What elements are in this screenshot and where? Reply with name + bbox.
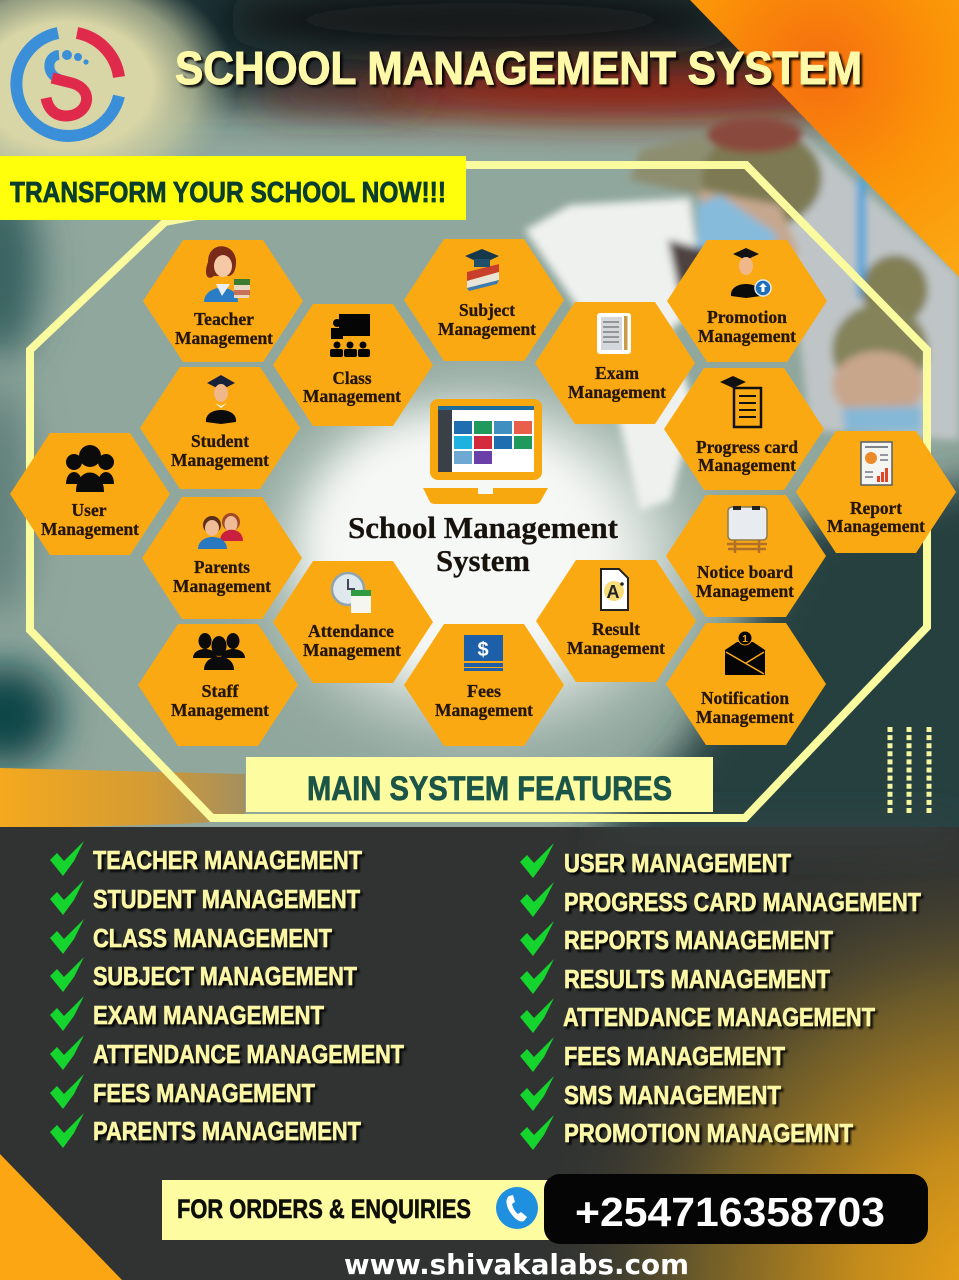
hex: staff management: Staff	[202, 681, 239, 701]
feature list: left column: ATTENDANCE MANAGEMENT	[93, 1039, 404, 1069]
feature list: left column	[50, 841, 404, 1148]
title: SCHOOL MANAGEMENT SYSTEM	[175, 42, 862, 94]
hex: exam management: Exam	[595, 363, 639, 383]
hex: progress card management	[664, 368, 824, 490]
banner: transform your school	[0, 156, 466, 220]
hex: notice board management: Notice board	[697, 562, 793, 582]
icon: laptop dashboard	[423, 399, 548, 504]
hex: notification management	[666, 623, 826, 745]
hex: parents management: Management	[173, 576, 271, 596]
hex: fees management: $	[477, 639, 489, 661]
hex: teacher management: Teacher	[194, 309, 254, 329]
hex: promotion management: Management	[698, 326, 796, 346]
hex: exam management: Management	[568, 382, 666, 402]
hex: class management	[273, 304, 433, 426]
hex: notification management: 1	[742, 634, 748, 645]
center heading	[348, 510, 619, 578]
hex: notification management: Management	[696, 707, 794, 727]
hex: attendance management	[273, 561, 433, 683]
center heading: School Management	[348, 510, 619, 545]
dotted decoration	[890, 727, 929, 813]
hex: user management: Management	[41, 519, 139, 539]
feature list: left column: PARENTS MANAGEMENT	[93, 1116, 361, 1146]
octagon frame	[30, 165, 927, 818]
feature list: right column: PROMOTION MANAGEMNT	[564, 1118, 853, 1148]
hex: attendance management: Management	[303, 640, 401, 660]
hex: fees management	[404, 624, 564, 746]
feature list: right column: RESULTS MANAGEMENT	[564, 964, 830, 994]
hex: progress card management: Progress card	[696, 437, 798, 457]
contact bar: FOR ORDERS & ENQUIRIES	[177, 1194, 471, 1224]
heading: main system features: MAIN SYSTEM FEATURES	[307, 770, 672, 808]
hex: user management	[10, 433, 170, 555]
feature list: right column	[520, 843, 921, 1150]
feature list: right column: REPORTS MANAGEMENT	[564, 925, 833, 955]
feature list: left column: SUBJECT MANAGEMENT	[93, 961, 357, 991]
hex: promotion management: Promotion	[707, 307, 787, 327]
hex: result management: Management	[567, 638, 665, 658]
hex: notice board management: Management	[696, 581, 794, 601]
hex: exam management	[535, 302, 695, 424]
corner: bottom left orange	[0, 1154, 122, 1280]
hex: user management: User	[72, 500, 107, 520]
hex: report management: Management	[827, 516, 925, 536]
hex: result management	[536, 560, 696, 682]
hex: progress card management: Management	[698, 455, 796, 475]
feature list: right column: USER MANAGEMENT	[564, 848, 791, 878]
feature list: left column: CLASS MANAGEMENT	[93, 923, 332, 953]
hex: fees management: Management	[435, 700, 533, 720]
hex: student management	[140, 367, 300, 489]
hex: subject management	[404, 239, 564, 361]
hex: class management: Class	[332, 368, 372, 388]
hex: subject management: Subject	[459, 300, 515, 320]
banner: transform your school: TRANSFORM YOUR SCHOOL NOW!!!	[10, 177, 446, 209]
feature list: right column: FEES MANAGEMENT	[564, 1041, 785, 1071]
hex: student management: Management	[171, 450, 269, 470]
corner: top right orange	[690, 0, 959, 277]
hex: attendance management: Attendance	[308, 621, 394, 641]
contact bar	[162, 1174, 928, 1244]
feature list: left column: STUDENT MANAGEMENT	[93, 884, 360, 914]
hex: promotion management	[667, 240, 827, 362]
hex: notice board management	[666, 495, 826, 617]
hex: notification management: Notification	[701, 688, 789, 708]
feature list: left column: EXAM MANAGEMENT	[93, 1000, 324, 1030]
hex: teacher management	[143, 240, 303, 362]
hex: parents management	[142, 497, 302, 619]
hex: subject management: Management	[438, 319, 536, 339]
hex: staff management: Management	[171, 700, 269, 720]
heading: main system features	[246, 757, 713, 812]
feature list: right column: SMS MANAGEMENT	[564, 1080, 781, 1110]
center heading: System	[436, 543, 530, 578]
feature list: left column: TEACHER MANAGEMENT	[93, 845, 362, 875]
hex: fees management: Fees	[467, 681, 501, 701]
hex: class management: Management	[303, 386, 401, 406]
icon: phone	[496, 1187, 538, 1229]
hex: teacher management: Management	[175, 328, 273, 348]
hexagon grid	[10, 239, 956, 746]
hex: result management: A	[606, 582, 620, 602]
photo: teacher and student in masks	[525, 117, 959, 510]
logo	[0, 0, 237, 210]
hex: staff management	[138, 624, 298, 746]
feature list: left column: FEES MANAGEMENT	[93, 1078, 315, 1108]
feature list: right column: ATTENDANCE MANAGEMENT	[563, 1002, 875, 1032]
contact bar: +254716358703	[575, 1189, 885, 1235]
hex: report management	[796, 431, 956, 553]
hex: student management: Student	[191, 431, 249, 451]
hex: report management: Report	[850, 498, 902, 518]
hex: parents management: Parents	[194, 557, 250, 577]
hex: result management: Result	[592, 619, 640, 639]
